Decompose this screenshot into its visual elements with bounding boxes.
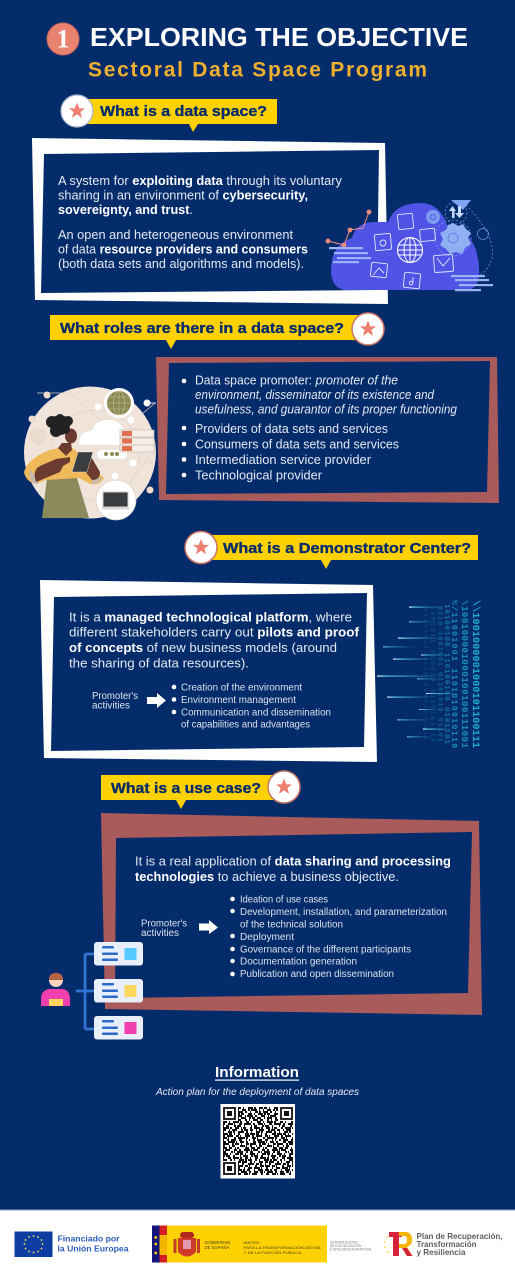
heading: what is a use case: What is a use case? — [111, 780, 261, 797]
logo: secretary of state label: SECRETARÍA DE ESTADO — [330, 1240, 358, 1244]
text: use case definition: It is a real application of data sharing and processing — [135, 854, 451, 868]
arrow — [147, 693, 166, 708]
logo: EU flag and funding label: Financiado por — [58, 1234, 120, 1244]
logo: Government of Spain ministry: GOBIERNO — [204, 1240, 231, 1245]
illustration: person with organisation chart — [41, 942, 143, 1040]
text: definition paragraph two — [58, 228, 308, 271]
bulleted list: roles: Data space promoter: promoter of the — [195, 374, 398, 388]
illustration: binary data stream: \\1001000001000101100111 — [469, 600, 481, 748]
information subtitle: Action plan for the deployment of data spaces — [155, 1086, 360, 1098]
arrow — [199, 920, 218, 934]
list: promoter activities: Creation of the environment — [181, 682, 302, 694]
subtitle: Sectoral Data Space Program — [88, 58, 427, 82]
illustration: binary data stream: \100100001000100100111001 — [459, 600, 469, 749]
logo: secretary of state label: E INTELIGENCIA ARTIFICIAL — [330, 1248, 372, 1252]
panel: use case — [101, 813, 482, 1015]
heading: what is a use case — [101, 771, 300, 809]
logo: secretary of state label — [330, 1240, 372, 1252]
logo: Government of Spain ministry: MINISTERIO — [244, 1240, 260, 1245]
text: demonstrator definition: different stakeholders carry out pilots and proof — [69, 624, 360, 640]
footer band — [0, 1210, 515, 1280]
logo: Government of Spain ministry — [152, 1226, 327, 1262]
label: promoter's activities: activities — [92, 700, 130, 712]
illustration: binary data stream: 1001011 010010 0110100110 — [429, 606, 436, 742]
icon: number one badge — [47, 23, 79, 55]
main title: EXPLORING THE OBJECTIVE — [90, 22, 468, 52]
text: definition paragraph two: An open and heterogeneous environment — [58, 228, 294, 242]
list: use case activities: Development, installation, and parameterization — [240, 907, 447, 918]
illustration: binary data stream: 0110 1001001 01101010 01101 — [435, 606, 443, 742]
text: definition paragraph two: (both data sets and algorithms and models). — [58, 257, 304, 271]
illustration: binary data stream — [377, 600, 481, 749]
heading: what is a data space: What is a data space? — [100, 103, 267, 120]
logo: recovery plan: y Resiliencia — [416, 1247, 466, 1257]
list: use case activities: Deployment — [240, 932, 294, 943]
list: use case activities: of the technical solution — [240, 920, 343, 930]
heading: what is a demonstrator center: What is a Demonstrator Center? — [223, 540, 471, 557]
list: promoter activities: Communication and dissemination — [181, 708, 331, 718]
list: use case activities: Governance of the different participants — [240, 944, 411, 956]
panel: what is a data space — [32, 138, 388, 304]
label: promoter's activities: Promoter's — [92, 691, 138, 702]
text: definition paragraph one — [58, 174, 343, 217]
label: promoter's activities: activities — [141, 928, 179, 939]
text: definition paragraph one: A system for exploiting data through its voluntary — [58, 174, 343, 188]
text: demonstrator definition — [69, 610, 360, 670]
logo: secretary of state label: DE DIGITALIZACIÓN — [330, 1243, 362, 1248]
logo: EU flag and funding label — [14, 1232, 129, 1257]
bulleted list: roles: usefulness, and guarantor of its proper functioning — [195, 402, 457, 416]
list: use case activities: Publication and open dissemination — [240, 969, 394, 980]
label: promoter's activities: Promoter's — [141, 918, 187, 930]
illustration: binary data stream: 0101001101010 01001011010 — [422, 608, 429, 740]
text: definition paragraph one: sharing in an environment of cybersecurity, — [58, 188, 308, 202]
text: definition paragraph one: sovereignty, and trust. — [58, 203, 193, 217]
QR code — [220, 1104, 295, 1178]
logo: recovery plan: Transformación — [416, 1239, 476, 1249]
logo: EU flag and funding label: la Unión Europea — [58, 1244, 129, 1254]
heading: roles in a data space: What roles are there in a data space? — [60, 320, 344, 337]
logo: recovery plan: Plan de Recuperación, — [416, 1231, 502, 1241]
illustration: binary data stream: %/11001001 1101010010110 — [449, 600, 458, 748]
bulleted list: roles: Providers of data sets and services — [195, 422, 388, 436]
bulleted list: roles: Technological provider — [195, 468, 322, 482]
information heading: Information — [215, 1064, 299, 1081]
text: definition paragraph two: of data resource providers and consumers — [58, 242, 308, 256]
list: use case activities: Documentation generation — [240, 956, 357, 968]
text: use case definition: technologies to achieve a business objective. — [135, 869, 399, 884]
list: promoter activities: Environment management — [181, 695, 296, 706]
icon: data cloud illustration — [326, 200, 493, 291]
list: promoter activities — [172, 682, 331, 730]
bulleted list: roles — [182, 374, 457, 482]
list: use case activities — [230, 894, 447, 980]
heading: what is a demonstrator center — [185, 532, 478, 569]
illustration: binary data stream: 10100100 110100100 0101101 — [442, 604, 450, 744]
logo: Government of Spain ministry: DE ESPAÑA — [204, 1245, 230, 1250]
title block — [47, 22, 468, 82]
list: use case activities: Ideation of use cases — [240, 894, 328, 906]
heading: roles in a data space — [50, 313, 384, 349]
logo: Government of Spain ministry: PARA LA TRANSFORMACIÓN DIGITAL — [244, 1245, 322, 1250]
bulleted list: roles: Consumers of data sets and services — [195, 438, 399, 452]
text: use case definition — [135, 854, 451, 884]
bulleted list: roles: Intermediation service provider — [195, 453, 371, 467]
logo: recovery plan — [384, 1231, 502, 1257]
panel: roles in a data space — [156, 357, 499, 503]
label: promoter's activities — [92, 691, 138, 712]
text: demonstrator definition: of concepts of new business models (around — [69, 640, 337, 655]
illustration: woman with tablet — [24, 386, 156, 520]
bulleted list: roles: environment, disseminator of its existence and — [195, 388, 435, 402]
panel: demonstrator center — [40, 580, 377, 762]
list: promoter activities: of capabilities and advantages — [181, 720, 310, 730]
icon: number one badge: 1 — [56, 24, 70, 54]
label: promoter's activities — [141, 918, 187, 939]
logo: Government of Spain ministry: Y DE LA FUNCIÓN PÚBLICA — [244, 1250, 302, 1255]
text: demonstrator definition: It is a managed technological platform , where — [69, 610, 352, 624]
text: demonstrator definition: the sharing of data resources). — [69, 656, 249, 670]
heading: what is a data space — [61, 95, 277, 132]
